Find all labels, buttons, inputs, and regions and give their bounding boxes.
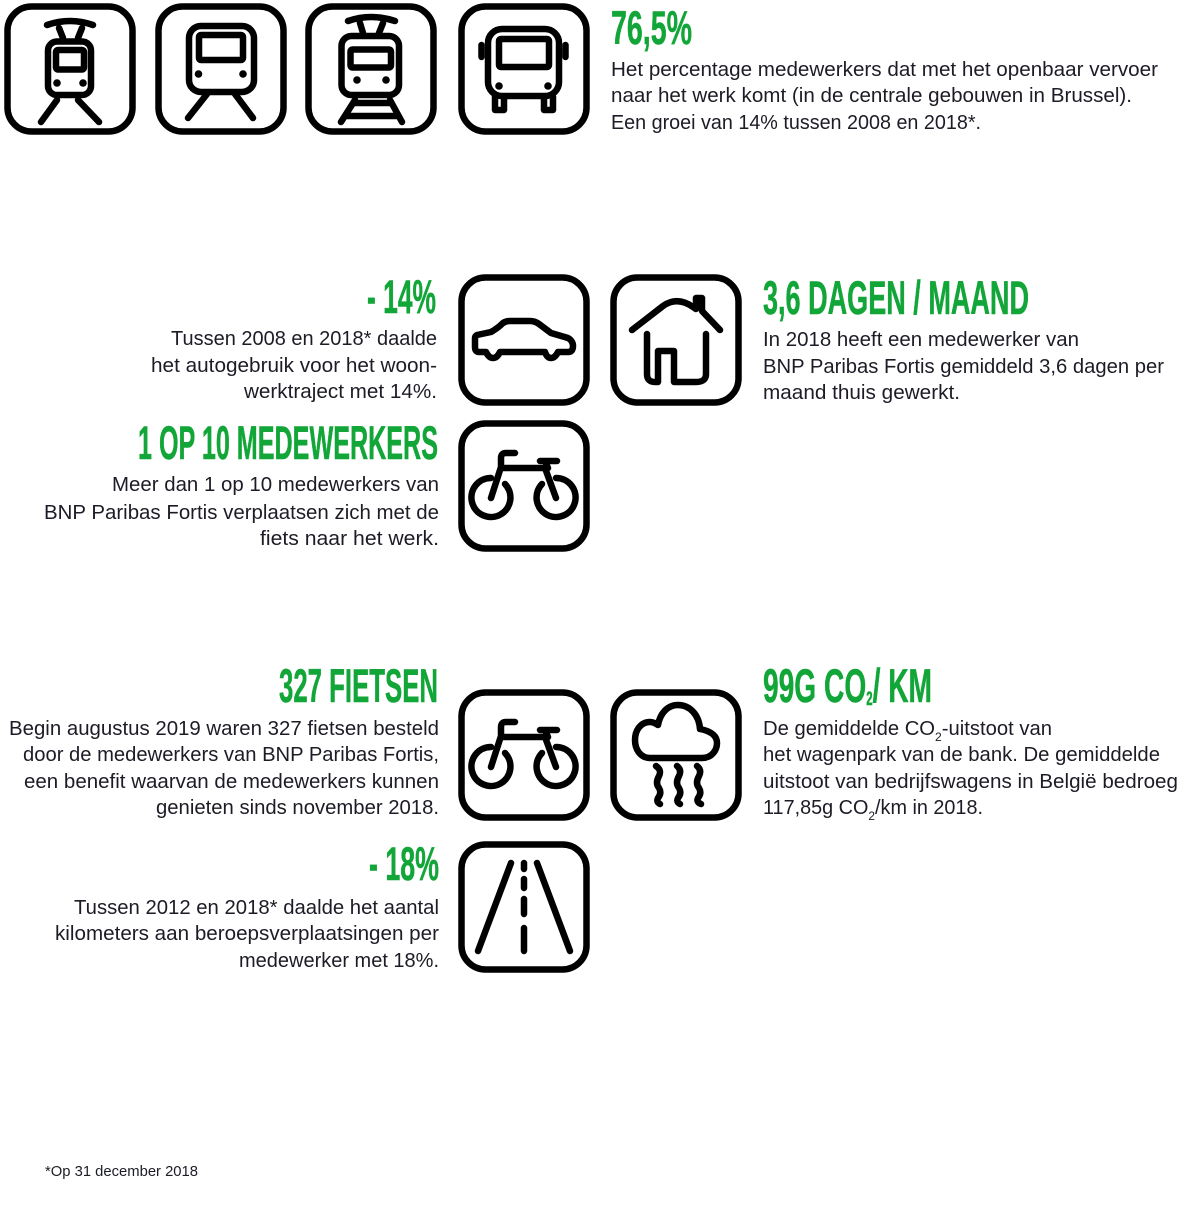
text: cycling bbox=[44, 474, 439, 550]
icon: metro bbox=[158, 6, 284, 132]
icon: tram bbox=[8, 6, 132, 132]
text: business kilometres: medewerker met 18%. bbox=[239, 950, 439, 972]
text: car use: het autogebruik voor het woon- bbox=[151, 355, 437, 377]
icon: road bbox=[462, 844, 586, 970]
heading: 327 fietsen: 327 FIETSEN bbox=[279, 659, 438, 712]
text: fleet emissions: -uitstoot van bbox=[942, 718, 1052, 740]
stat block: 76,5% bbox=[611, 1, 1158, 134]
icon: bicycle bbox=[462, 424, 586, 548]
text: cycling: fiets naar het werk. bbox=[260, 528, 439, 550]
icon: bus bbox=[462, 6, 586, 132]
text: public transport: Een groei van 14% tussen 2008 en 2018*. bbox=[611, 112, 981, 134]
icon: light rail bbox=[308, 6, 434, 132]
text: public transport: Het percentage medewerkers dat met het openbaar vervoer bbox=[611, 59, 1158, 81]
text: public transport bbox=[611, 59, 1158, 134]
text: fleet emissions: uitstoot van bedrijfswagens in België bedroeg bbox=[763, 771, 1178, 793]
footnote: *Op 31 december 2018 bbox=[45, 1163, 198, 1180]
text: homeworking bbox=[763, 329, 1164, 404]
text: bike leasing: Begin augustus 2019 waren 327 fietsen besteld bbox=[9, 718, 439, 740]
heading: 1 op 10 medewerkers: 1 OP 10 MEDEWERKERS bbox=[138, 416, 438, 469]
text: car use bbox=[151, 328, 437, 403]
stat block: -18% bbox=[55, 837, 439, 972]
text: cycling: BNP Paribas Fortis verplaatsen zich met de bbox=[44, 502, 439, 524]
icon: car bbox=[462, 278, 586, 402]
text: fleet emissions: het wagenpark van de bank. De gemiddelde bbox=[763, 744, 1160, 766]
text: cycling: Meer dan 1 op 10 medewerkers van bbox=[112, 474, 439, 496]
heading: -18%: - 18% bbox=[369, 837, 439, 890]
stat block: 3,6 dagen bbox=[763, 271, 1164, 404]
text: fleet emissions: De gemiddelde CO bbox=[763, 718, 933, 740]
heading: -14%: - 14% bbox=[367, 270, 436, 323]
text: car use: Tussen 2008 en 2018* daalde bbox=[171, 328, 437, 350]
text: bike leasing: een benefit waarvan de medewerkers kunnen bbox=[24, 771, 439, 793]
icon: emissions cloud bbox=[614, 692, 738, 818]
heading: 99g co2/km: 2 bbox=[866, 689, 873, 710]
text: fleet emissions: 2 bbox=[868, 809, 875, 823]
text: homeworking: In 2018 heeft een medewerker van bbox=[763, 329, 1079, 351]
heading: 99g co2/km: / KM bbox=[873, 659, 932, 712]
icon: house bbox=[614, 278, 738, 402]
icon: bicycle bbox=[462, 692, 586, 818]
stat block: 99g co2 bbox=[763, 659, 1178, 823]
text: business kilometres bbox=[55, 897, 439, 972]
heading: 99g co2/km: 99G CO bbox=[763, 659, 935, 712]
text: bike leasing: genieten sinds november 2018. bbox=[156, 797, 439, 819]
text: business kilometres: kilometers aan beroepsverplaatsingen per bbox=[55, 923, 439, 945]
text: fleet emissions: 117,85g CO bbox=[763, 797, 869, 819]
stat block: 1 op 10 bbox=[44, 416, 439, 550]
text: fleet emissions: 2 bbox=[935, 730, 942, 744]
text: fleet emissions bbox=[763, 718, 1178, 823]
text: bike leasing bbox=[9, 718, 439, 819]
text: business kilometres: Tussen 2012 en 2018* daalde het aantal bbox=[74, 897, 439, 919]
heading: 76,5%: 76,5% bbox=[611, 1, 692, 54]
stat block: 327 fietsen bbox=[9, 659, 439, 819]
text: fleet emissions: /km in 2018. bbox=[875, 797, 983, 819]
text: homeworking: maand thuis gewerkt. bbox=[763, 382, 960, 404]
text: homeworking: BNP Paribas Fortis gemiddeld 3,6 dagen per bbox=[763, 356, 1164, 378]
stat block: -14% bbox=[151, 270, 437, 403]
text: bike leasing: door de medewerkers van BNP Paribas Fortis, bbox=[23, 744, 439, 766]
text: public transport: naar het werk komt (in de centrale gebouwen in Brussel). bbox=[611, 85, 1132, 107]
text: car use: werktraject met 14%. bbox=[243, 381, 437, 403]
